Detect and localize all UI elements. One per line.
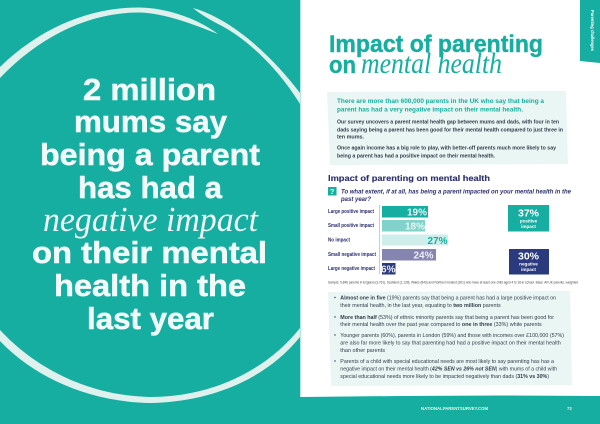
bullet: more than half (340, 315, 554, 328)
bullet: more than half: More than half (53%) of ethnic minority parents say that being a parent has been good for (340, 315, 554, 321)
side tab: Parenting challenges (580, 0, 600, 63)
chart heading: Impact of parenting on mental health (328, 173, 490, 183)
panel: intro box (327, 91, 568, 165)
survey question (340, 190, 572, 203)
bar: small negative: 24% (413, 250, 434, 262)
headline: 2 million mums (32, 72, 267, 336)
bar: large negative: 6% (381, 264, 396, 276)
bullet: special educational needs: special educational needs more likely to be impacted negatively than dads (31% vs 30%) (340, 374, 549, 380)
intro body text: Once again income has a big role to play, with better-off parents much more likely to say (337, 146, 556, 152)
panel: left teal page (0, 0, 301, 424)
bar: small positive: 18% (405, 222, 425, 232)
headline: 2 million mums: health in the (54, 268, 246, 303)
headline: 2 million mums: 2 million (83, 72, 216, 107)
bullet: younger parents: Younger parents (60%), parents in London (59%) and those with incomes over £100,000 (57%) (340, 333, 564, 339)
footer band (300, 396, 600, 424)
intro body text: being a parent has had a positive impact on their mental health. (337, 154, 495, 160)
headline: 2 million mums: mums say (74, 104, 228, 139)
bullet: special educational needs: Parents of a child with special educational needs are most likely to say parenting has has a (340, 359, 554, 365)
summary: 30% negative impact: 30% (518, 250, 540, 262)
panel: findings box (328, 291, 572, 386)
headline: 2 million mums: has had a (78, 170, 223, 205)
title: mental health (361, 47, 502, 80)
bar: no impact: No impact (328, 238, 350, 244)
bullet: almost one in five: their mental health, in the last year, equating to two million parents (340, 303, 501, 309)
bar: large negative (328, 263, 396, 276)
side tab: Parenting challenges: Parenting challenges (590, 10, 595, 51)
bullet: younger parents: are also far more likely to say that parenting had had a positive impact on their mental health (340, 340, 561, 346)
icon: question mark (328, 187, 336, 196)
summary: 37% positive impact: positive (520, 218, 538, 224)
headline: 2 million mums: negative impact (43, 200, 259, 239)
bar: small positive: Small positive impact (328, 223, 374, 229)
footer band: 73 (567, 406, 572, 411)
bullet: almost one in five (340, 296, 556, 309)
headline: 2 million mums: on their mental (32, 235, 267, 270)
intro body text: dads saying being a parent has been good for their mental health compared to just three in (337, 128, 563, 134)
summary: 30% negative impact: impact (521, 267, 536, 272)
bullet: younger parents (340, 333, 564, 354)
summary: 30% negative impact: negative (519, 262, 538, 266)
bar: large positive: 19% (407, 208, 427, 218)
bullet: special educational needs: negative impact on their mental health (42% SEN vs 26% not SEN) with mums of a child with (340, 366, 557, 372)
intro body text: Our survey uncovers a parent mental health gap between mums and dads, with four in ten (337, 120, 559, 126)
title: Impact of parenting (329, 31, 543, 58)
intro heading (337, 98, 545, 114)
bullet: younger parents: than other parents (340, 348, 385, 354)
summary: 37% positive impact: 37% (518, 208, 540, 220)
bar: large negative: Large negative impact (328, 266, 375, 272)
headline: 2 million mums: last year (87, 301, 214, 336)
bar: large positive: Large positive impact (328, 209, 374, 215)
bullet: special educational needs (340, 359, 557, 380)
bullet: more than half: their mental health over the past year compared to one in three (33%) white parents (340, 322, 542, 328)
title: on (329, 52, 356, 79)
intro heading: parent has had a very negative impact on their mental health. (337, 106, 523, 114)
bar: no impact: 27% (427, 236, 448, 247)
sample note: Sample: 5,846 parents in England (3,761), Scotland (1,139), Wales (843) and Northern Ireland (301) who have at least one child aged 4 to 18 in school. Base: All UK parents, weighted (328, 280, 578, 284)
bar: small positive (328, 220, 425, 232)
title (329, 31, 543, 80)
bar: small negative: Small negative impact (328, 252, 376, 258)
icon: hand-drawn circle (0, 7, 300, 403)
bar: small negative (328, 249, 436, 262)
summary: 37% positive impact (508, 205, 549, 232)
survey question: To what extent, if at all, has being a parent impacted on your mental health in the (341, 190, 572, 196)
summary: 37% positive impact: impact (521, 224, 536, 229)
bar: no impact (328, 234, 448, 247)
intro body text: ten mums. (337, 134, 364, 140)
intro heading: There are more than 600,000 parents in the UK who say that being a (337, 98, 545, 105)
summary: 30% negative impact (509, 249, 549, 274)
survey question: past year? (340, 197, 371, 203)
headline: 2 million mums: being a parent (40, 137, 260, 172)
bar: large positive (328, 206, 428, 218)
footer band: NATIONALPARENTSURVEY.COM (421, 406, 489, 411)
icon: question mark: ? (330, 187, 335, 196)
bullet points (334, 297, 336, 362)
bar chart (328, 205, 448, 276)
bullet: almost one in five: Almost one in five (19%) parents say that being a parent has had a large positive impact on (340, 296, 556, 302)
intro body text (337, 120, 563, 160)
